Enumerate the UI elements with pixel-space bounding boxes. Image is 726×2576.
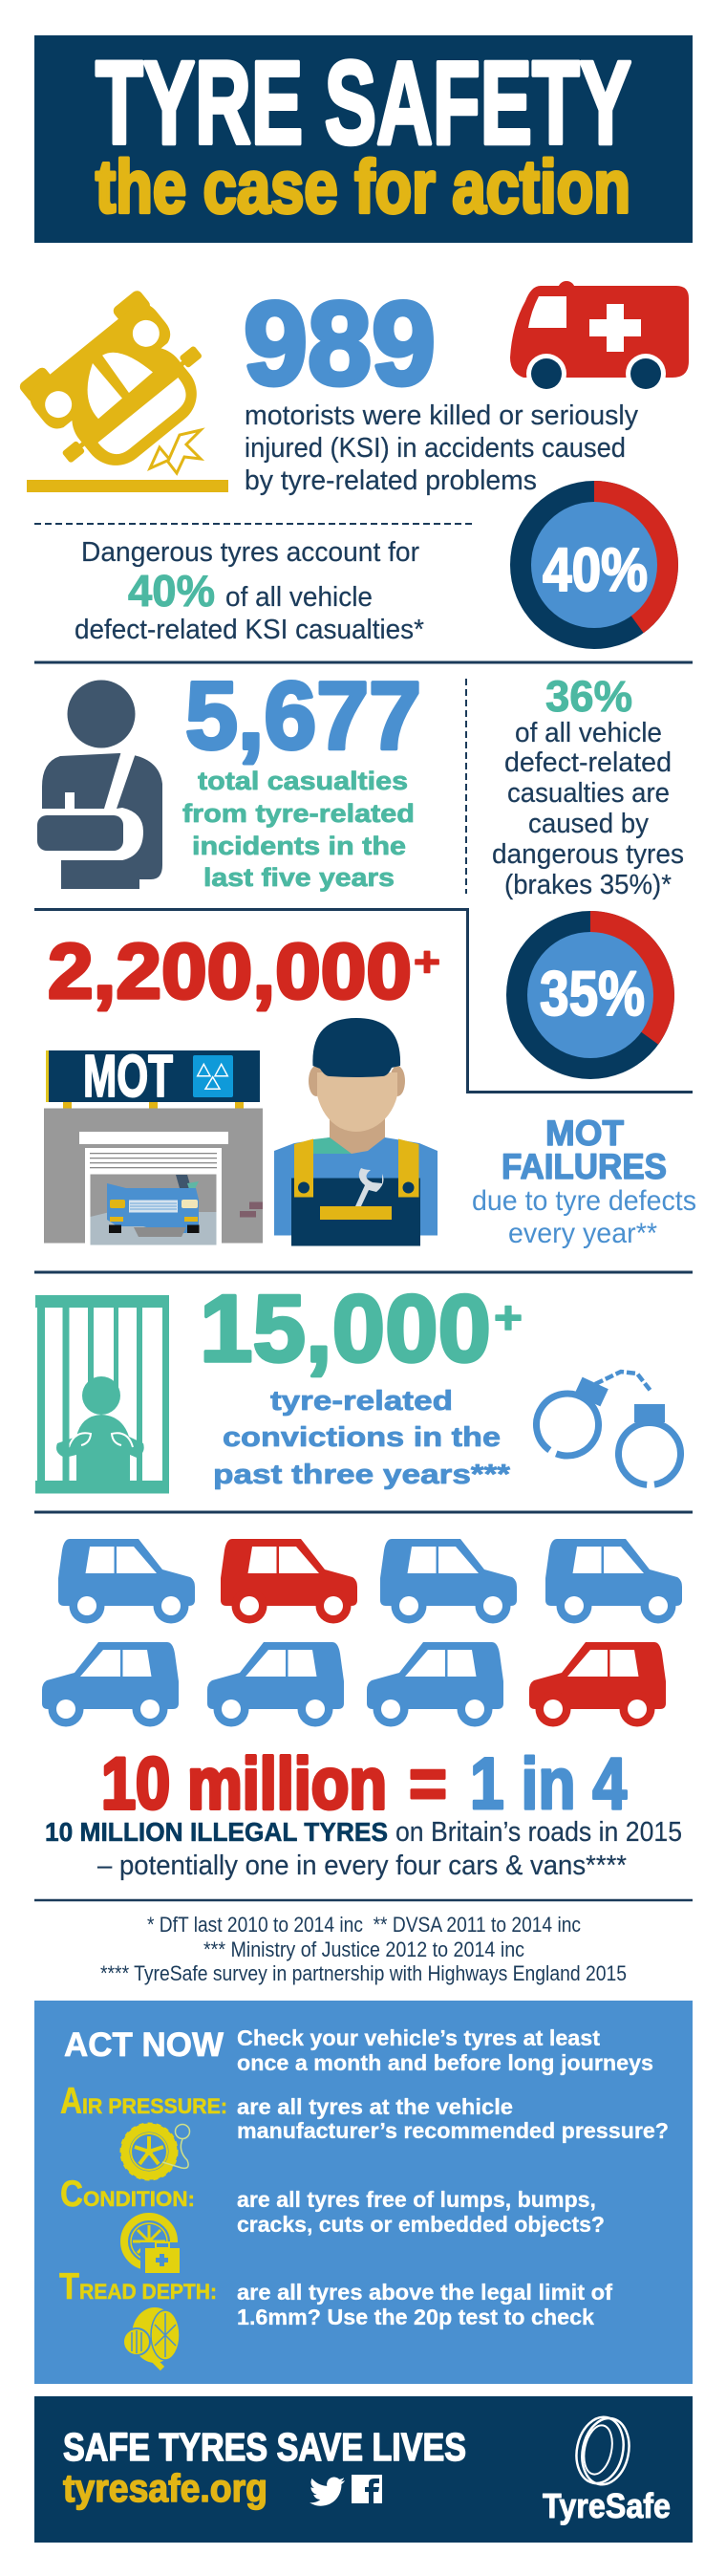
icon: car 8 red [529, 1642, 666, 1726]
text: dangerous tyres 40%: of all vehicle [225, 582, 373, 613]
text: 10 million illegal tyres [45, 1817, 682, 1881]
text: 36% of all vehicle defects [492, 672, 684, 900]
text: tyre-related convictions [213, 1386, 511, 1490]
text: tyre-related convictions: convictions in the [223, 1422, 501, 1453]
stat: 15,000+: + [494, 1293, 523, 1344]
text: 10 million illegal tyres: on Britain’s roads in 2015 [395, 1817, 682, 1848]
text: tyre-related convictions: past three years*** [213, 1460, 511, 1490]
stat: 15,000+: 15,000 [200, 1275, 491, 1381]
text: air pressure question: manufacturer’s recommended pressure? [237, 2118, 669, 2143]
text: air pressure question [237, 2094, 669, 2143]
text: motorists killed or injured: by tyre-related problems [245, 465, 537, 496]
panel: act now [34, 2001, 693, 2384]
text: air pressure question: are all tyres at the vehicle [237, 2094, 513, 2119]
text: motorists killed or injured [245, 400, 638, 496]
website: tyresafe.org [63, 2466, 267, 2510]
icon: handcuffs [524, 1372, 683, 1487]
text: 36% of all vehicle defects: of all vehicle [515, 718, 662, 748]
footnotes: **** TyreSafe survey in partnership with Highways England 2015 [100, 1961, 627, 1985]
logo: TyreSafe: TyreSafe [543, 2486, 671, 2525]
header banner [34, 35, 693, 243]
text: tread depth question: 1.6mm? Use the 20p test to check [237, 2305, 594, 2329]
icon: twitter [310, 2477, 345, 2506]
footnotes [100, 1913, 627, 1985]
text: MOT failures: MOT [545, 1114, 624, 1153]
label: air pressure [60, 2081, 227, 2122]
icon: MOT garage: MOT [83, 1044, 173, 1110]
text: dangerous tyres 40%: defect-related KSI casualties* [75, 615, 424, 645]
icon: car 2 red [221, 1539, 357, 1623]
text: 36% of all vehicle defects: (brakes 35%)* [504, 870, 672, 900]
heading: 10 million = 1 in 4: 1 in 4 [470, 1743, 627, 1825]
text: dangerous tyres 40% [75, 537, 424, 645]
label: tread depth: READ DEPTH: [79, 2280, 217, 2304]
text: MOT failures: every year** [508, 1218, 657, 1249]
icon: tyre with first aid box [124, 2217, 182, 2275]
label: tread depth: T [59, 2266, 79, 2307]
panel: footer [34, 2396, 693, 2543]
text: condition question: cracks, cuts or embedded objects? [237, 2212, 605, 2237]
text: total casualties: from tyre-related [182, 799, 415, 828]
icon: car 7 blue [367, 1642, 503, 1726]
heading: act now: ACT NOW [64, 2026, 224, 2064]
heading: 10 million = 1 in 4: 10 million [101, 1743, 387, 1825]
icon: MOT garage [44, 1044, 263, 1245]
label: air pressure: A [60, 2081, 82, 2122]
text: tyre-related convictions: tyre-related [270, 1386, 453, 1417]
text: 10 million illegal tyres: 10 MILLION ILLEGAL TYRES [45, 1817, 388, 1847]
text: total casualties: incidents in the [192, 832, 406, 860]
text: total casualties: last five years [203, 863, 395, 892]
footnotes: *** Ministry of Justice 2012 to 2014 inc [203, 1937, 524, 1961]
logo: TyreSafe [543, 2413, 671, 2525]
heading: 10 million = 1 in 4 [101, 1743, 627, 1825]
text: tread depth question: are all tyres above the legal limit of [237, 2280, 612, 2305]
label: tread depth [59, 2266, 217, 2307]
text: MOT failures [472, 1114, 696, 1249]
stat: 2,200,000+: + [414, 939, 440, 985]
stat: 989: 989 [244, 279, 436, 410]
text: total casualties [182, 767, 415, 892]
label: air pressure: IR PRESSURE: [82, 2094, 227, 2118]
icon: facebook [352, 2475, 382, 2503]
heading: 10 million = 1 in 4: = [409, 1743, 447, 1825]
text: condition question [237, 2187, 605, 2237]
text: dangerous tyres 40%: Dangerous tyres account for [81, 537, 419, 568]
icon: overturned car [11, 284, 228, 492]
icon: car 1 blue [58, 1539, 195, 1623]
text: MOT failures: FAILURES [502, 1147, 667, 1186]
text: check tyres: Check your vehicle’s tyres at least [237, 2025, 600, 2050]
text: check tyres [237, 2025, 653, 2075]
icon: ambulance [510, 281, 689, 394]
text: total casualties: total casualties [198, 767, 408, 795]
text: MOT failures: due to tyre defects [472, 1185, 696, 1217]
icon: car 6 blue [207, 1642, 344, 1726]
slogan: SAFE TYRES SAVE LIVES [63, 2425, 466, 2469]
donut chart: 40% [510, 481, 678, 649]
icon: person with arm in sling [34, 681, 162, 889]
label: condition: C [60, 2174, 83, 2215]
text: 36% of all vehicle defects: casualties are [507, 778, 670, 809]
text: 36% of all vehicle defects: 36% [545, 672, 632, 721]
donut chart: 40%: 40% [543, 535, 648, 604]
stat: 2,200,000+: 2,200,000 [48, 928, 412, 1015]
icon: car 3 blue [380, 1539, 517, 1623]
icon: mechanic [274, 1018, 438, 1246]
icon: car 4 blue [545, 1539, 682, 1623]
text: motorists killed or injured: motorists were killed or seriously [245, 400, 638, 431]
label: condition: ONDITION: [83, 2187, 195, 2211]
text: motorists killed or injured: injured (KSI) in accidents caused [245, 433, 626, 464]
text: tread depth question [237, 2280, 612, 2329]
icon: prisoner behind bars [35, 1295, 169, 1493]
footnotes: * DfT last 2010 to 2014 inc ** DVSA 2011 to 2014 inc [147, 1913, 581, 1937]
text: 36% of all vehicle defects: caused by [528, 809, 649, 839]
text: condition question: are all tyres free of lumps, bumps, [237, 2187, 596, 2212]
text: 36% of all vehicle defects: defect-related [504, 747, 672, 778]
text: 36% of all vehicle defects: dangerous tyres [492, 839, 684, 870]
cars row: one in four highlighted [42, 1539, 682, 1726]
donut chart: 35% [506, 911, 674, 1079]
donut chart: 35%: 35% [540, 958, 645, 1028]
icon: tyre with magnifying glass [123, 2307, 180, 2369]
icon: tyre with pressure gauge [121, 2124, 189, 2179]
text: 10 million illegal tyres: – potentially one in every four cars & vans**** [97, 1851, 627, 1881]
label: condition [60, 2174, 195, 2215]
text: dangerous tyres 40%: 40% [128, 566, 215, 616]
icon: car 5 blue [42, 1642, 179, 1726]
text: check tyres: once a month and before long journeys [237, 2050, 653, 2075]
stat: 5,677: 5,677 [185, 662, 421, 769]
